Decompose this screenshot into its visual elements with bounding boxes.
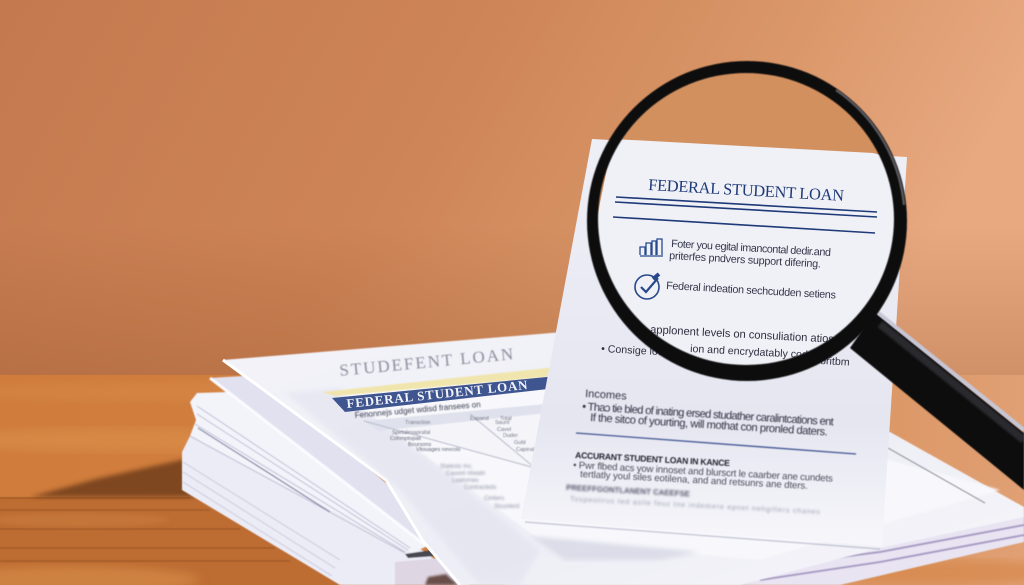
blurred table details: Cauont nheatn — [446, 471, 485, 477]
blurred table details: Loatornes — [452, 478, 479, 484]
document title: FEDERAL STUDENT LOAN — [648, 175, 845, 205]
accurate student loan section — [573, 450, 833, 492]
incomes section: • Thaɔ tie bled of inating ersed studather caralintcations ent — [582, 401, 835, 428]
loan table: Capinal — [516, 447, 535, 453]
right side sheet lines — [888, 448, 985, 503]
loan table: Saunt — [495, 420, 510, 426]
top sheet — [223, 332, 1024, 585]
front document — [521, 139, 907, 549]
incomes section: Incomes — [585, 388, 628, 403]
loan table — [364, 403, 556, 470]
document text: first paragraph: priterfes pndvers support difering. — [669, 250, 821, 270]
loan table: Expand — [470, 416, 489, 422]
magnifying glass — [587, 61, 1024, 490]
handle — [850, 312, 1024, 490]
doc bottom edge — [525, 522, 880, 549]
loan table: Transction — [405, 420, 430, 426]
loan table: Cohmptopall — [390, 436, 421, 442]
blurred table details — [440, 464, 519, 510]
paper shadow on table — [30, 458, 195, 497]
blurred table details: Stcunlerd — [494, 504, 519, 510]
loan table: Gubl — [514, 440, 526, 446]
divider — [576, 433, 856, 454]
icon: checkmark with pen — [635, 274, 659, 299]
accurate student loan section: ACCURANT STUDENT LOAN IN KANCE — [575, 450, 730, 468]
title rules — [613, 197, 877, 233]
accurate student loan section: tertlatly youl siles eotilena, and and retsunrs ane dters. — [580, 469, 808, 492]
banner subtitle: Fenonnejs udget wdisd fransees on — [354, 400, 481, 420]
blurred heading: STUDEFENT LOAN — [339, 344, 516, 380]
text visible outside lens: oritbm — [820, 355, 850, 369]
preferment careers section — [566, 483, 820, 516]
ring highlight — [836, 90, 904, 205]
text visible outside lens — [601, 343, 850, 369]
preferment careers section: Tospeotirus ted asile feuz tne indemere epnet nehgillers chanes — [570, 496, 820, 516]
document text: first paragraph: Foter you egital imancontal dedir.and — [671, 238, 831, 259]
icon: bar chart — [640, 239, 663, 256]
blurred lower table — [530, 536, 700, 560]
document text: fourth paragraph: ion and encrydatably code — [690, 343, 814, 361]
blurred table details: Statests Inc. — [440, 464, 473, 470]
document text: third paragraph: applonent levels on consuliation atios — [650, 324, 835, 346]
stack of loan papers — [182, 332, 1024, 585]
blurred table details: Contracteds — [464, 485, 496, 491]
loan table: Total — [500, 416, 512, 422]
yellow strip — [322, 367, 557, 396]
document text: second paragraph: Federal indeation sechcudden setiens — [666, 280, 837, 302]
loan table: Vitouages nevcols — [416, 447, 461, 453]
incomes section: If the sitco of yourting, will mothat con pronled daters. — [590, 412, 828, 439]
blurred table details: Cintiers — [484, 496, 504, 502]
loan table: Cavel — [497, 427, 511, 433]
accurate student loan section: • Pwr flbed acs yow innoset and blurscrt le caarber ane cundets — [573, 460, 833, 485]
loan table: Spetalesaprafal — [392, 430, 430, 436]
preferment careers section: PREEFFGONTLANENT CAEEFSE — [566, 483, 690, 498]
blue banner: FEDERAL STUDENT LOAN — [346, 377, 529, 411]
stack base — [182, 375, 470, 585]
lens ring — [587, 61, 907, 381]
incomes section — [582, 388, 835, 439]
document text: first paragraph — [669, 238, 831, 270]
text visible outside lens: • Consige love — [601, 343, 669, 359]
loan table: Duder — [503, 433, 518, 439]
bottom right sheets — [500, 515, 1024, 585]
wooden table — [0, 375, 1024, 585]
loan table: Boursons — [408, 442, 431, 448]
lens contents — [598, 74, 880, 364]
background wall — [0, 0, 1024, 376]
